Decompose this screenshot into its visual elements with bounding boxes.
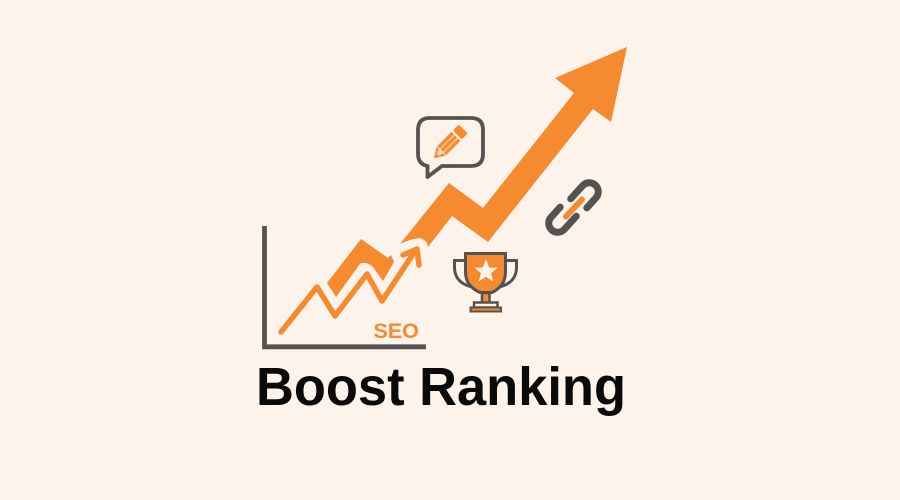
icon: trophy [454, 254, 516, 312]
icon: speech bubble with pencil [418, 118, 483, 177]
SEO label: SEO [374, 319, 419, 343]
orange arrow tail segment [327, 239, 394, 297]
SEO trend line with arrowhead [281, 249, 419, 332]
star [474, 259, 498, 282]
pencil [430, 125, 468, 163]
large orange arrow [400, 47, 627, 247]
icon: chain link [549, 183, 598, 232]
chart axes [264, 226, 426, 347]
title: Boost Ranking [256, 357, 626, 417]
